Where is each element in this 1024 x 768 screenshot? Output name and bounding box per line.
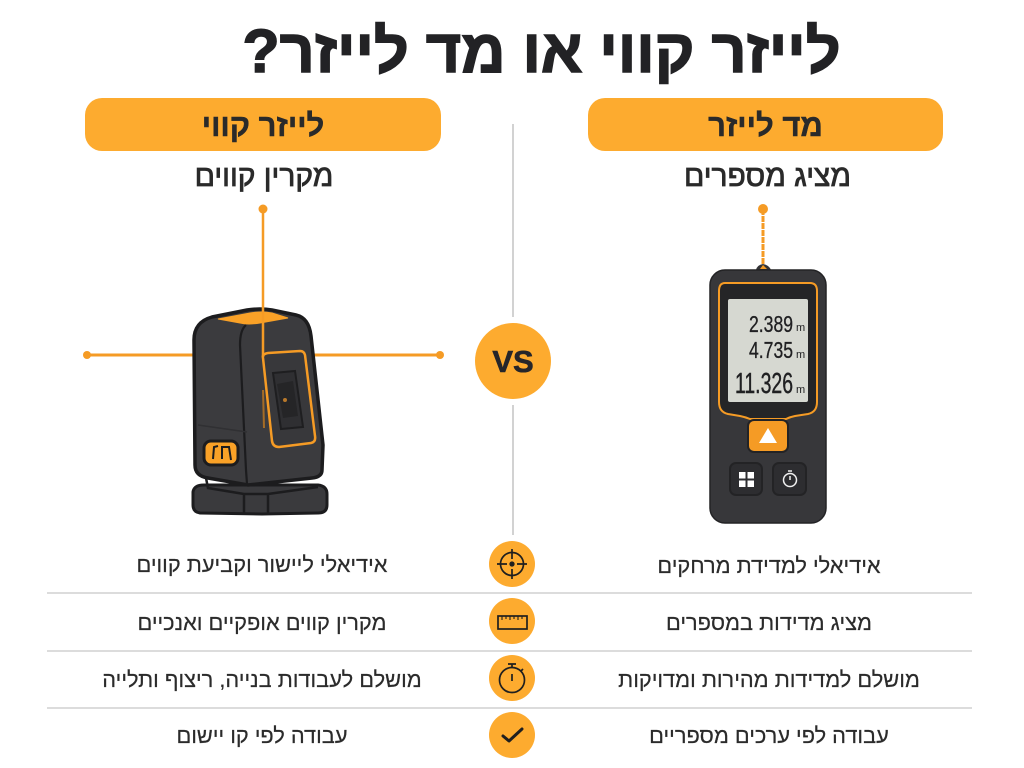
vertical beam	[258, 204, 268, 428]
heading pill: laser meter	[588, 98, 943, 151]
subheading: shows numbers: מציג מספרים	[684, 160, 851, 193]
main button	[748, 420, 788, 452]
row icons	[489, 541, 535, 758]
top orange panel	[218, 312, 288, 324]
icon: ruler	[489, 598, 535, 644]
timer button	[773, 463, 806, 495]
horizontal beam	[83, 351, 444, 359]
lcd screen: 2.389	[749, 311, 793, 337]
side button	[204, 441, 238, 465]
row dividers	[47, 592, 972, 594]
vs badge	[475, 323, 551, 399]
title: לייזר קווי או מד לייזר?	[242, 17, 841, 85]
icon: stopwatch	[489, 655, 535, 701]
device body	[710, 270, 826, 523]
laser meter illustration	[709, 204, 827, 524]
beam	[756, 204, 771, 270]
heading pill: line laser	[85, 98, 441, 151]
line laser illustration	[83, 204, 444, 516]
lcd screen: m	[796, 349, 805, 361]
screen bezel	[719, 283, 817, 419]
body	[194, 309, 323, 485]
lcd screen: 11.326	[735, 368, 793, 400]
row 4 left text: עבודה לפי קו יישום	[176, 723, 348, 748]
front window	[263, 351, 315, 447]
row 1 right text: אידיאלי למדידת מרחקים	[657, 553, 881, 578]
icon: check mark	[489, 712, 535, 758]
subheading: projects lines: מקרין קווים	[195, 160, 333, 193]
row 1 left text: אידיאלי ליישור וקביעת קווים	[137, 552, 387, 577]
row 2 left text: מקרין קווים אופקיים ואנכיים	[137, 610, 387, 635]
centre divider with VS badge	[475, 124, 551, 535]
heading pill: laser meter: מד לייזר	[708, 108, 823, 143]
row 3 left text: מושלם לעבודות בנייה, ריצוף ותלייה	[102, 667, 422, 692]
vs badge: VS	[492, 344, 534, 379]
lcd screen: m	[796, 322, 805, 334]
row 3 right text: מושלם למדידות מהירות ומדויקות	[618, 667, 920, 692]
lcd screen: m	[796, 384, 805, 396]
row 2 right text: מציג מדידות במספרים	[666, 610, 872, 635]
heading pill: line laser: לייזר קווי	[202, 108, 324, 143]
grid button	[730, 463, 762, 495]
row 4 right text: עבודה לפי ערכים מספריים	[649, 723, 889, 748]
base	[193, 485, 327, 514]
lcd screen: 4.735	[749, 337, 793, 363]
lcd screen	[728, 299, 808, 402]
icon: crosshair	[489, 541, 535, 587]
